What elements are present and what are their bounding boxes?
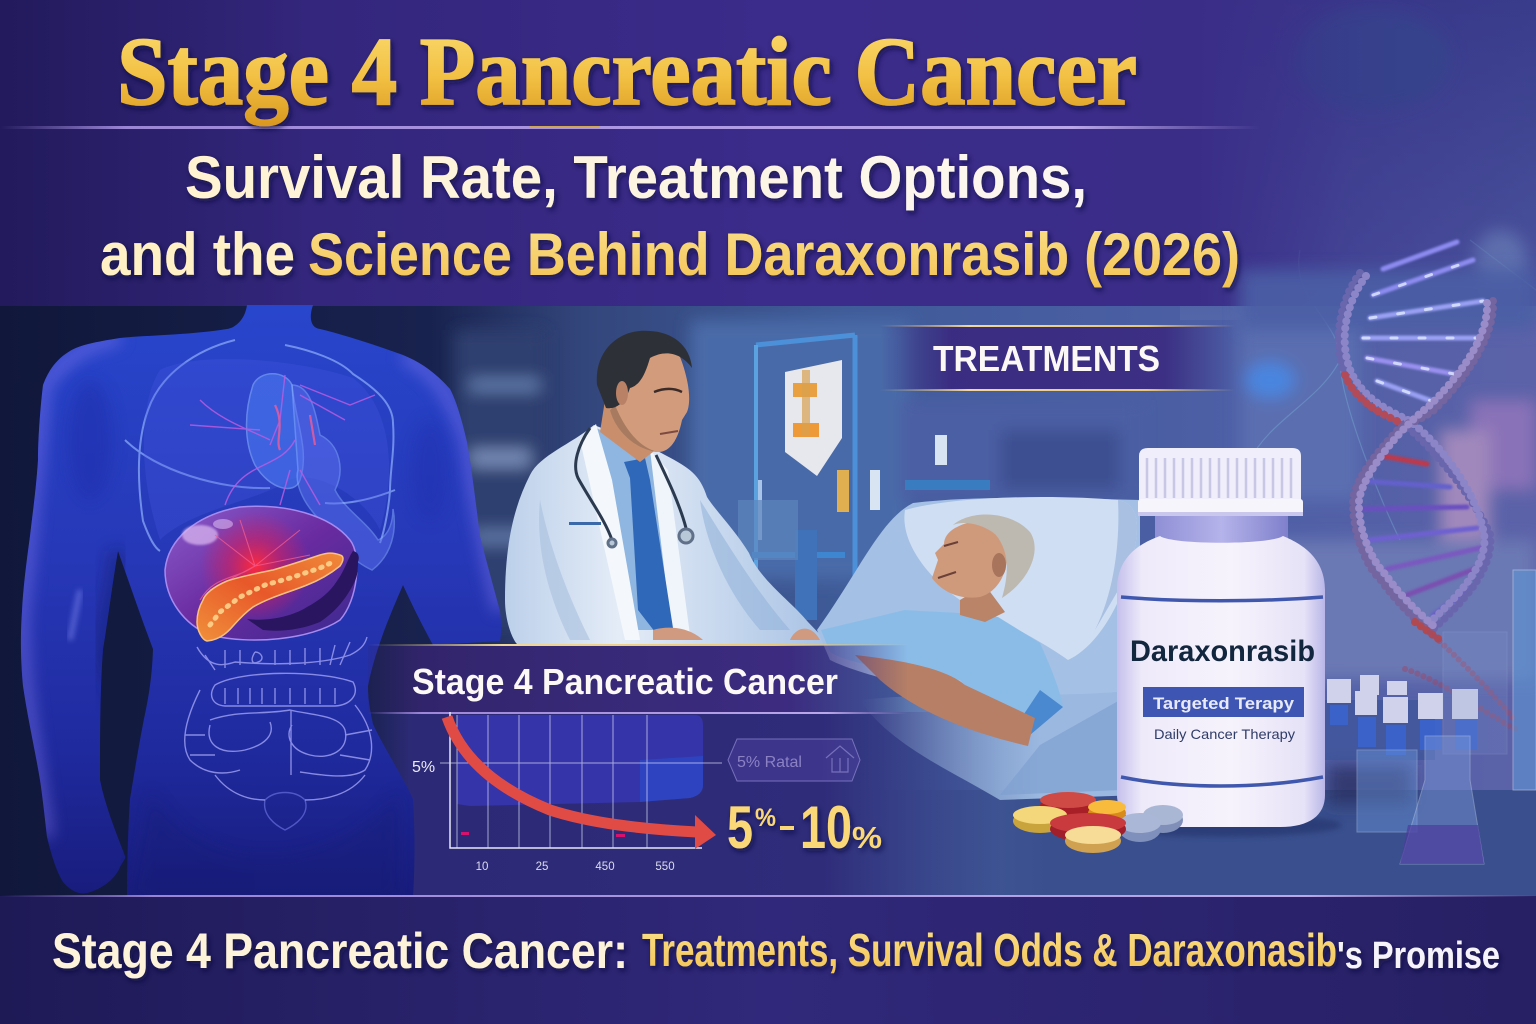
subtitle line 2: Science Behind Daraxonrasib (2026) <box>308 221 1240 288</box>
stat: 5%-10%: % <box>755 804 776 832</box>
chart panel: Stage 4 Pancreatic Cancer: Stage 4 Pancreatic Cancer <box>412 661 838 702</box>
stat: 5%-10%: 10 <box>800 794 852 861</box>
blood vessels <box>190 375 375 505</box>
patient head <box>932 515 1035 622</box>
title: Stage 4 Pancreatic Cancer <box>117 18 1137 126</box>
footer band <box>0 895 1536 1024</box>
survival chart <box>412 712 722 873</box>
DNA helix <box>1339 242 1517 730</box>
chart x labels: 10 <box>476 861 488 873</box>
pillow <box>904 497 1137 660</box>
icon: IV bag <box>785 360 842 476</box>
stethoscope <box>576 428 693 547</box>
patient gown <box>821 610 1063 740</box>
chart x labels: 25 <box>536 861 548 873</box>
footer caption: Stage 4 Pancreatic Cancer: <box>52 923 628 979</box>
lab glassware <box>1325 570 1536 864</box>
stat: 5%-10%: % <box>852 820 882 855</box>
bottle stripes <box>1121 597 1323 786</box>
chart panel: Stage 4 Pancreatic Cancer <box>368 644 908 714</box>
bottle label: Targeted Therapy <box>1143 687 1304 717</box>
panel: TREATMENTS: TREATMENTS <box>933 338 1160 379</box>
arrow: falling survival <box>447 717 716 849</box>
badge: 5% Ratal: 5% Ratal <box>737 754 802 771</box>
bottle label: Targeted Therapy: Targeted Terapy <box>1153 694 1295 713</box>
chart x labels: 550 <box>655 861 675 873</box>
chart plot area <box>457 715 703 806</box>
table surface <box>860 790 1536 898</box>
body silhouette <box>21 305 501 897</box>
subtitle line 1: Survival Rate, Treatment Options, <box>185 144 1087 211</box>
stat: 5%-10% <box>727 794 882 861</box>
pills <box>1013 792 1183 853</box>
chart backdrop <box>360 712 1000 898</box>
footer caption <box>52 923 1500 979</box>
body rim light and muscle shading <box>22 338 500 900</box>
organ: liver <box>165 506 357 640</box>
badge: 5% Ratal <box>728 739 860 781</box>
bottle neck <box>1155 512 1288 546</box>
chest outlines <box>125 340 395 551</box>
subtitle line 2: and the <box>100 221 295 288</box>
stat: 5%-10%: 5 <box>727 794 753 861</box>
organ: heart and stomach <box>246 374 394 570</box>
bed sheet <box>860 690 1140 800</box>
doctor pocket <box>569 522 601 525</box>
bed head section <box>817 498 1140 720</box>
doctor hands <box>653 628 820 640</box>
chart y label: 5% <box>412 759 435 776</box>
patient in bed <box>817 497 1140 800</box>
organ: intestines <box>185 637 372 830</box>
panel: TREATMENTS <box>880 325 1235 391</box>
footer caption: Treatments, Survival Odds & Daraxonasib <box>642 924 1337 976</box>
medicine bottle <box>1102 448 1342 837</box>
patient arm <box>855 655 1035 746</box>
bottle name: Daraxonrasib <box>1130 635 1315 668</box>
bottle body <box>1117 536 1325 827</box>
anatomical body <box>21 305 501 900</box>
chart x labels <box>476 861 675 873</box>
lab equipment behind doctor <box>738 335 990 620</box>
header band <box>0 0 1536 330</box>
bottle cap <box>1138 448 1303 516</box>
doctor coat <box>505 425 830 645</box>
chart x labels: 450 <box>595 861 615 873</box>
organ: pancreas <box>197 553 343 641</box>
organ: dark spleen <box>247 551 359 631</box>
doctor tie <box>624 458 673 632</box>
doctor neck and head <box>597 331 692 462</box>
doctor <box>505 331 830 645</box>
bottle subtitle: Daily Cancer Therapy <box>1154 726 1295 742</box>
footer caption: 's Promise <box>1337 935 1500 977</box>
